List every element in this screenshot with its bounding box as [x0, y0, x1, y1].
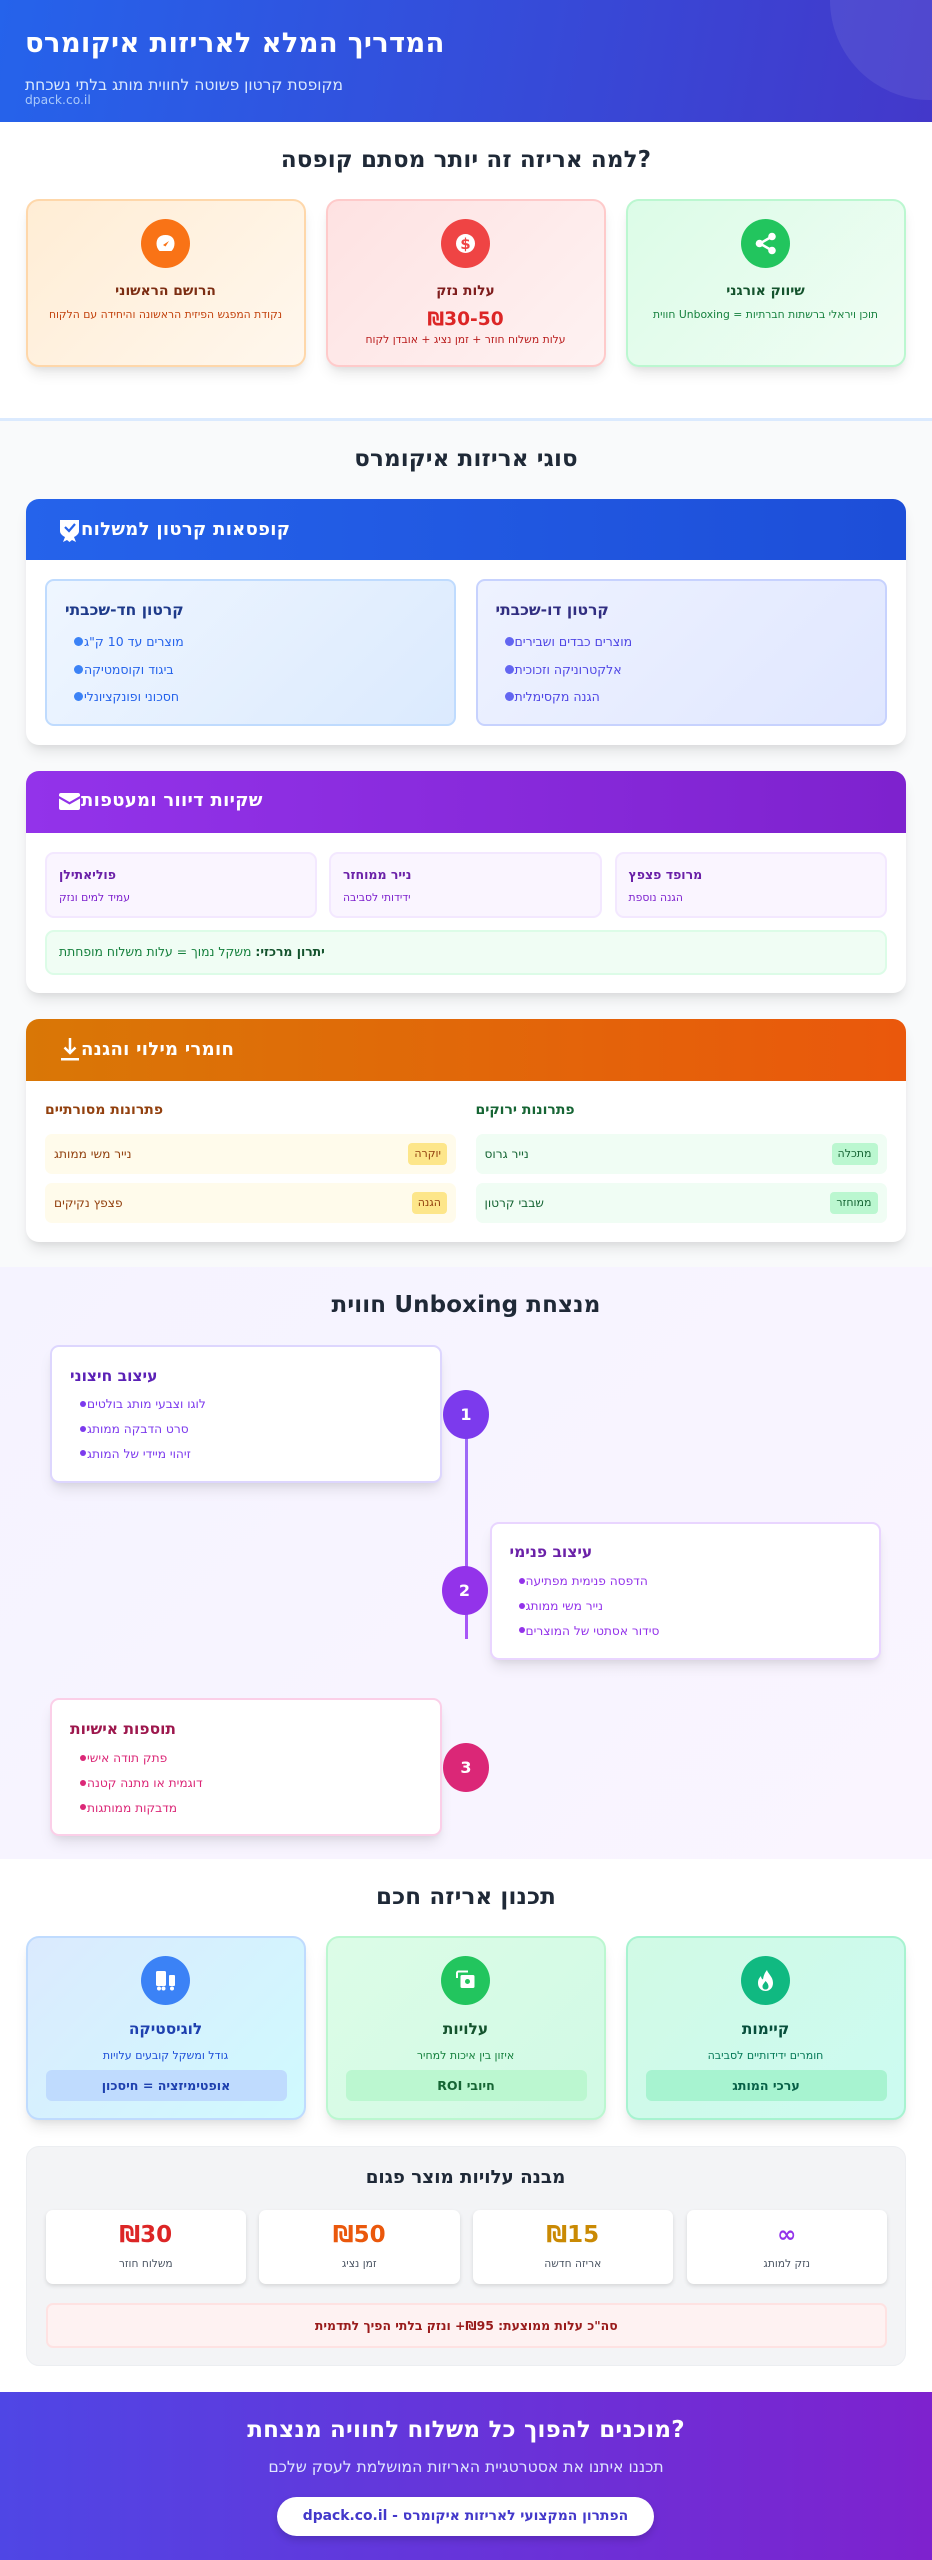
value: ∞ [777, 2222, 796, 2248]
card text: גודל ומשקל קובעים עלויות [103, 2049, 228, 2062]
card title: עלות נזק [436, 283, 495, 299]
row: shredded paper [476, 1134, 886, 1174]
stat: agent time [259, 2210, 460, 2284]
step 1 card [50, 1345, 442, 1482]
stat: new packaging [472, 2210, 673, 2284]
list [74, 634, 184, 704]
column title: פתרונות ירוקים [476, 1102, 575, 1118]
column title: פתרונות מסורתיים [45, 1102, 163, 1118]
cards row [25, 1936, 907, 2129]
step 3 number: 3 [460, 1758, 472, 1776]
list: ביגוד וקוסמטיקה [84, 662, 174, 677]
value: ₪30 [119, 2222, 172, 2248]
badge: יוקרה [414, 1147, 441, 1160]
header [0, 0, 932, 122]
row: cardboard chips [476, 1183, 886, 1222]
column: green solutions [476, 1102, 887, 1223]
label: אריזה חדשה [544, 2256, 601, 2270]
sub-card text: עמיד למים ונזק [59, 891, 130, 904]
badge [412, 1192, 447, 1214]
badge [830, 1192, 878, 1214]
callout: key advantage [45, 930, 886, 975]
row: tissue paper [45, 1134, 456, 1174]
label: נזק למותג [763, 2256, 810, 2270]
section: unboxing experience [0, 1267, 932, 1859]
step list: זיהוי מיידי של המותג [87, 1446, 191, 1460]
step list: מדבקות ממותגות [87, 1800, 177, 1814]
column: traditional solutions [45, 1102, 456, 1223]
pill [646, 2070, 886, 2101]
badge: מתכלה [838, 1147, 872, 1160]
card title: עלויות [443, 2020, 488, 2038]
stat: brand damage [686, 2210, 887, 2284]
step 3 number [443, 1742, 489, 1792]
pill: אופטימיזציה = חיסכון [102, 2078, 230, 2093]
sub-card: recycled paper [329, 852, 602, 918]
step list: נייר משי ממותג [526, 1599, 603, 1613]
step list [80, 1397, 206, 1460]
step 1 number [443, 1390, 489, 1438]
icon: dollar [441, 219, 490, 268]
card text: איזון בין איכות למחיר [417, 2049, 514, 2062]
sub-card: polyethylene [45, 852, 317, 918]
label: זמן נציג [342, 2256, 377, 2270]
row: shredded paper: נייר גרוס [484, 1147, 529, 1161]
card text: נקודת המפגש הפיזית הראשונה והיחידה עם הלקוח [49, 308, 282, 321]
icon: share [741, 219, 790, 268]
step title: עיצוב חיצוני [70, 1367, 157, 1385]
card title: קיימות [742, 2020, 789, 2038]
pill [346, 2070, 586, 2101]
panel: mailers and envelopes [26, 771, 906, 993]
badge: ממוחזר [836, 1196, 872, 1209]
list: חסכוני ופונקציונלי [84, 689, 179, 704]
value: ₪50 [333, 2222, 386, 2248]
list: אלקטרוניקה וזכוכית [514, 662, 622, 677]
step 2 number: 2 [459, 1580, 470, 1600]
pill [46, 2070, 286, 2101]
panel title: קופסאות קרטון למשלוח [81, 518, 290, 540]
list: מוצרים כבדים ושבירים [514, 634, 632, 649]
sub-card title: מרופד פצפץ [628, 867, 702, 882]
label: משלוח חוזר [119, 2256, 173, 2270]
panel header [26, 1019, 906, 1080]
panel title: חומרי מילוי והגנה [81, 1039, 234, 1060]
stat: return shipping [46, 2210, 246, 2284]
card: damage cost [326, 199, 606, 367]
call to action [0, 2392, 932, 2560]
total callout [46, 2303, 887, 2348]
row: peanuts: פצפץ נקיקים [54, 1196, 123, 1210]
list: מוצרים עד 10 ק"ג [84, 634, 184, 649]
section: packaging types [0, 421, 932, 1267]
sub-card: bubble padded [614, 852, 886, 918]
step 2 card [490, 1522, 880, 1660]
step 2 number [442, 1566, 488, 1614]
panel header [26, 498, 906, 560]
list: הגנה מקסימלית [514, 689, 600, 704]
sub-card title: נייר ממוחזר [343, 867, 411, 882]
card: costs [326, 1936, 606, 2120]
cta button: dpack.co.il - הפתרון המקצועי לאריזות איקומרס [303, 2508, 628, 2524]
icon: download [61, 1038, 79, 1060]
step list [80, 1751, 203, 1814]
section heading: למה אריזה זה יותר מסתם קופסה? [281, 147, 651, 173]
website: dpack.co.il [25, 93, 91, 107]
section heading: סוגי אריזות איקומרס [354, 446, 578, 472]
step list: סידור אסתטי של המוצרים [526, 1624, 659, 1638]
icon: badge check [60, 520, 79, 542]
step list: סרט הדבקה ממותג [87, 1422, 189, 1436]
sub-card title: קרטון חד-שכבתי [65, 601, 184, 619]
row: cardboard chips: שבבי קרטון [484, 1196, 544, 1210]
pill: ערכי המותג [732, 2078, 800, 2093]
cards row [25, 199, 907, 376]
panel title: מבנה עלויות מוצר פגום [366, 2167, 565, 2188]
step list: דוגמית או מתנה קטנה [87, 1776, 203, 1790]
icon: cash [441, 1956, 490, 2005]
step list [519, 1574, 659, 1638]
card: sustainability [626, 1936, 906, 2120]
step title: עיצוב פנימי [510, 1543, 592, 1561]
card: organic marketing [626, 199, 906, 367]
badge [832, 1143, 878, 1164]
pill: ROI חיובי [437, 2078, 495, 2093]
step list: הדפסה פנימית מפתיעה [526, 1574, 648, 1588]
decorative circle [830, 0, 932, 100]
icon: gauge [141, 219, 190, 268]
card: logistics [26, 1936, 306, 2120]
cta button [277, 2496, 654, 2536]
section: smart packaging planning [0, 1859, 932, 2392]
sub-card title: קרטון דו-שכבתי [496, 601, 609, 619]
sub-card text: הגנה נוספת [628, 891, 683, 904]
panel header [26, 771, 906, 832]
icon: envelope [59, 793, 80, 810]
section heading: חווית Unboxing מנצחת [332, 1292, 600, 1318]
card text: חומרים ידידותיים לסביבה [708, 2049, 823, 2062]
list [505, 634, 632, 704]
cta text: תכננו איתנו את אסטרטגיית האריזות המושלמת לעסק שלכם [268, 2458, 664, 2476]
value: ₪15 [546, 2222, 599, 2248]
card title: הרושם הראשוני [115, 283, 216, 299]
sub-card: double wall [476, 579, 886, 726]
panel title: שקיות דיוור ומעטפות [81, 790, 263, 811]
panel: cost structure [26, 2146, 906, 2366]
step title: תוספות אישיות [70, 1720, 176, 1738]
total callout: סה"כ עלות ממוצעת: ₪95+ ונזק בלתי הפיך לתדמית [315, 2318, 618, 2333]
step 1 number: 1 [460, 1404, 472, 1424]
callout: key advantage: יתרון מרכזי: משקל נמוך = עלות משלוח מופחתת [59, 944, 325, 959]
sub-card title: פוליאתילן [59, 867, 116, 882]
timeline line [464, 1414, 468, 1639]
row: peanuts [45, 1183, 456, 1222]
sub-card text: ידידותי לסביבה [343, 891, 411, 904]
card title: לוגיסטיקה [129, 2020, 202, 2038]
row: tissue paper: נייר משי ממותג [54, 1147, 132, 1161]
badge [408, 1143, 447, 1164]
section: why packaging [0, 122, 932, 421]
panel: filling and protection materials [26, 1019, 906, 1242]
price: ₪30-50 [427, 309, 504, 330]
badge: הגנה [418, 1196, 441, 1209]
card: first impression [26, 199, 306, 367]
cta heading: מוכנים להפוך כל משלוח לחוויה מנצחת? [247, 2417, 685, 2443]
subtitle: מקופסת קרטון פשוטה לחווית מותג בלתי נשכחת [25, 76, 343, 94]
title: המדריך המלא לאריזות איקומרס [25, 27, 445, 59]
icon: flame [741, 1956, 790, 2005]
card text: עלות משלוח חוזר + זמן נציג + אובדן לקוח [365, 333, 566, 346]
sub-card: single wall [45, 579, 456, 726]
step 3 card [50, 1698, 442, 1836]
step list: לוגו וצבעי מותג בולטים [87, 1397, 206, 1411]
section heading: תכנון אריזה חכם [376, 1884, 556, 1910]
step list: פתק תודה אישי [87, 1751, 167, 1765]
icon: dollar: $ [460, 235, 471, 253]
panel: cardboard boxes [26, 498, 906, 745]
icon: trucks [141, 1956, 190, 2005]
card text: חווית Unboxing = תוכן ויראלי ברשתות חברתיות [653, 308, 878, 321]
card title: שיווק אורגני [726, 283, 805, 299]
